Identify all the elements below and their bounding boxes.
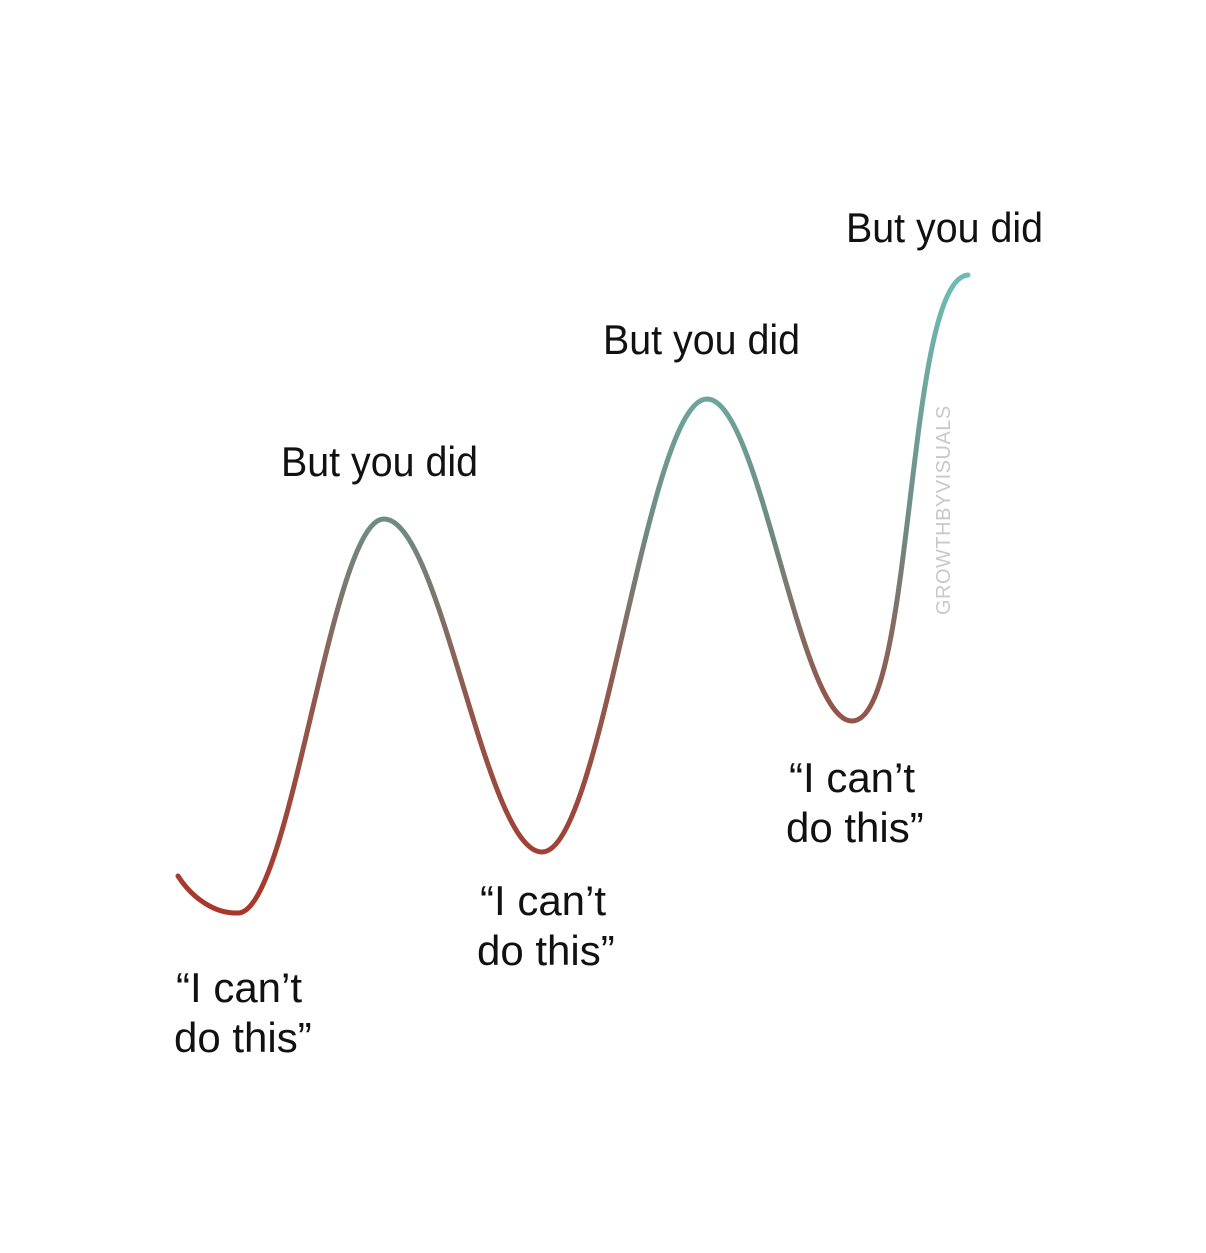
label: trough 2: “I can’t	[480, 877, 606, 924]
wave curve	[178, 275, 968, 913]
label: peak 3: But you did	[846, 204, 1043, 251]
label: trough 3: “I can’t	[789, 754, 915, 801]
label: trough 2: do this”	[477, 927, 615, 974]
watermark: GROWTHBYVISUALS	[933, 405, 955, 615]
label: peak 2: But you did	[603, 316, 800, 363]
label: trough 1	[174, 964, 312, 1061]
label: trough 1: “I can’t	[176, 964, 302, 1011]
label: trough 1: do this”	[174, 1014, 312, 1061]
label: trough 2	[477, 877, 615, 974]
label: trough 3: do this”	[786, 804, 924, 851]
label: trough 3	[786, 754, 924, 851]
label: peak 1: But you did	[281, 438, 478, 485]
